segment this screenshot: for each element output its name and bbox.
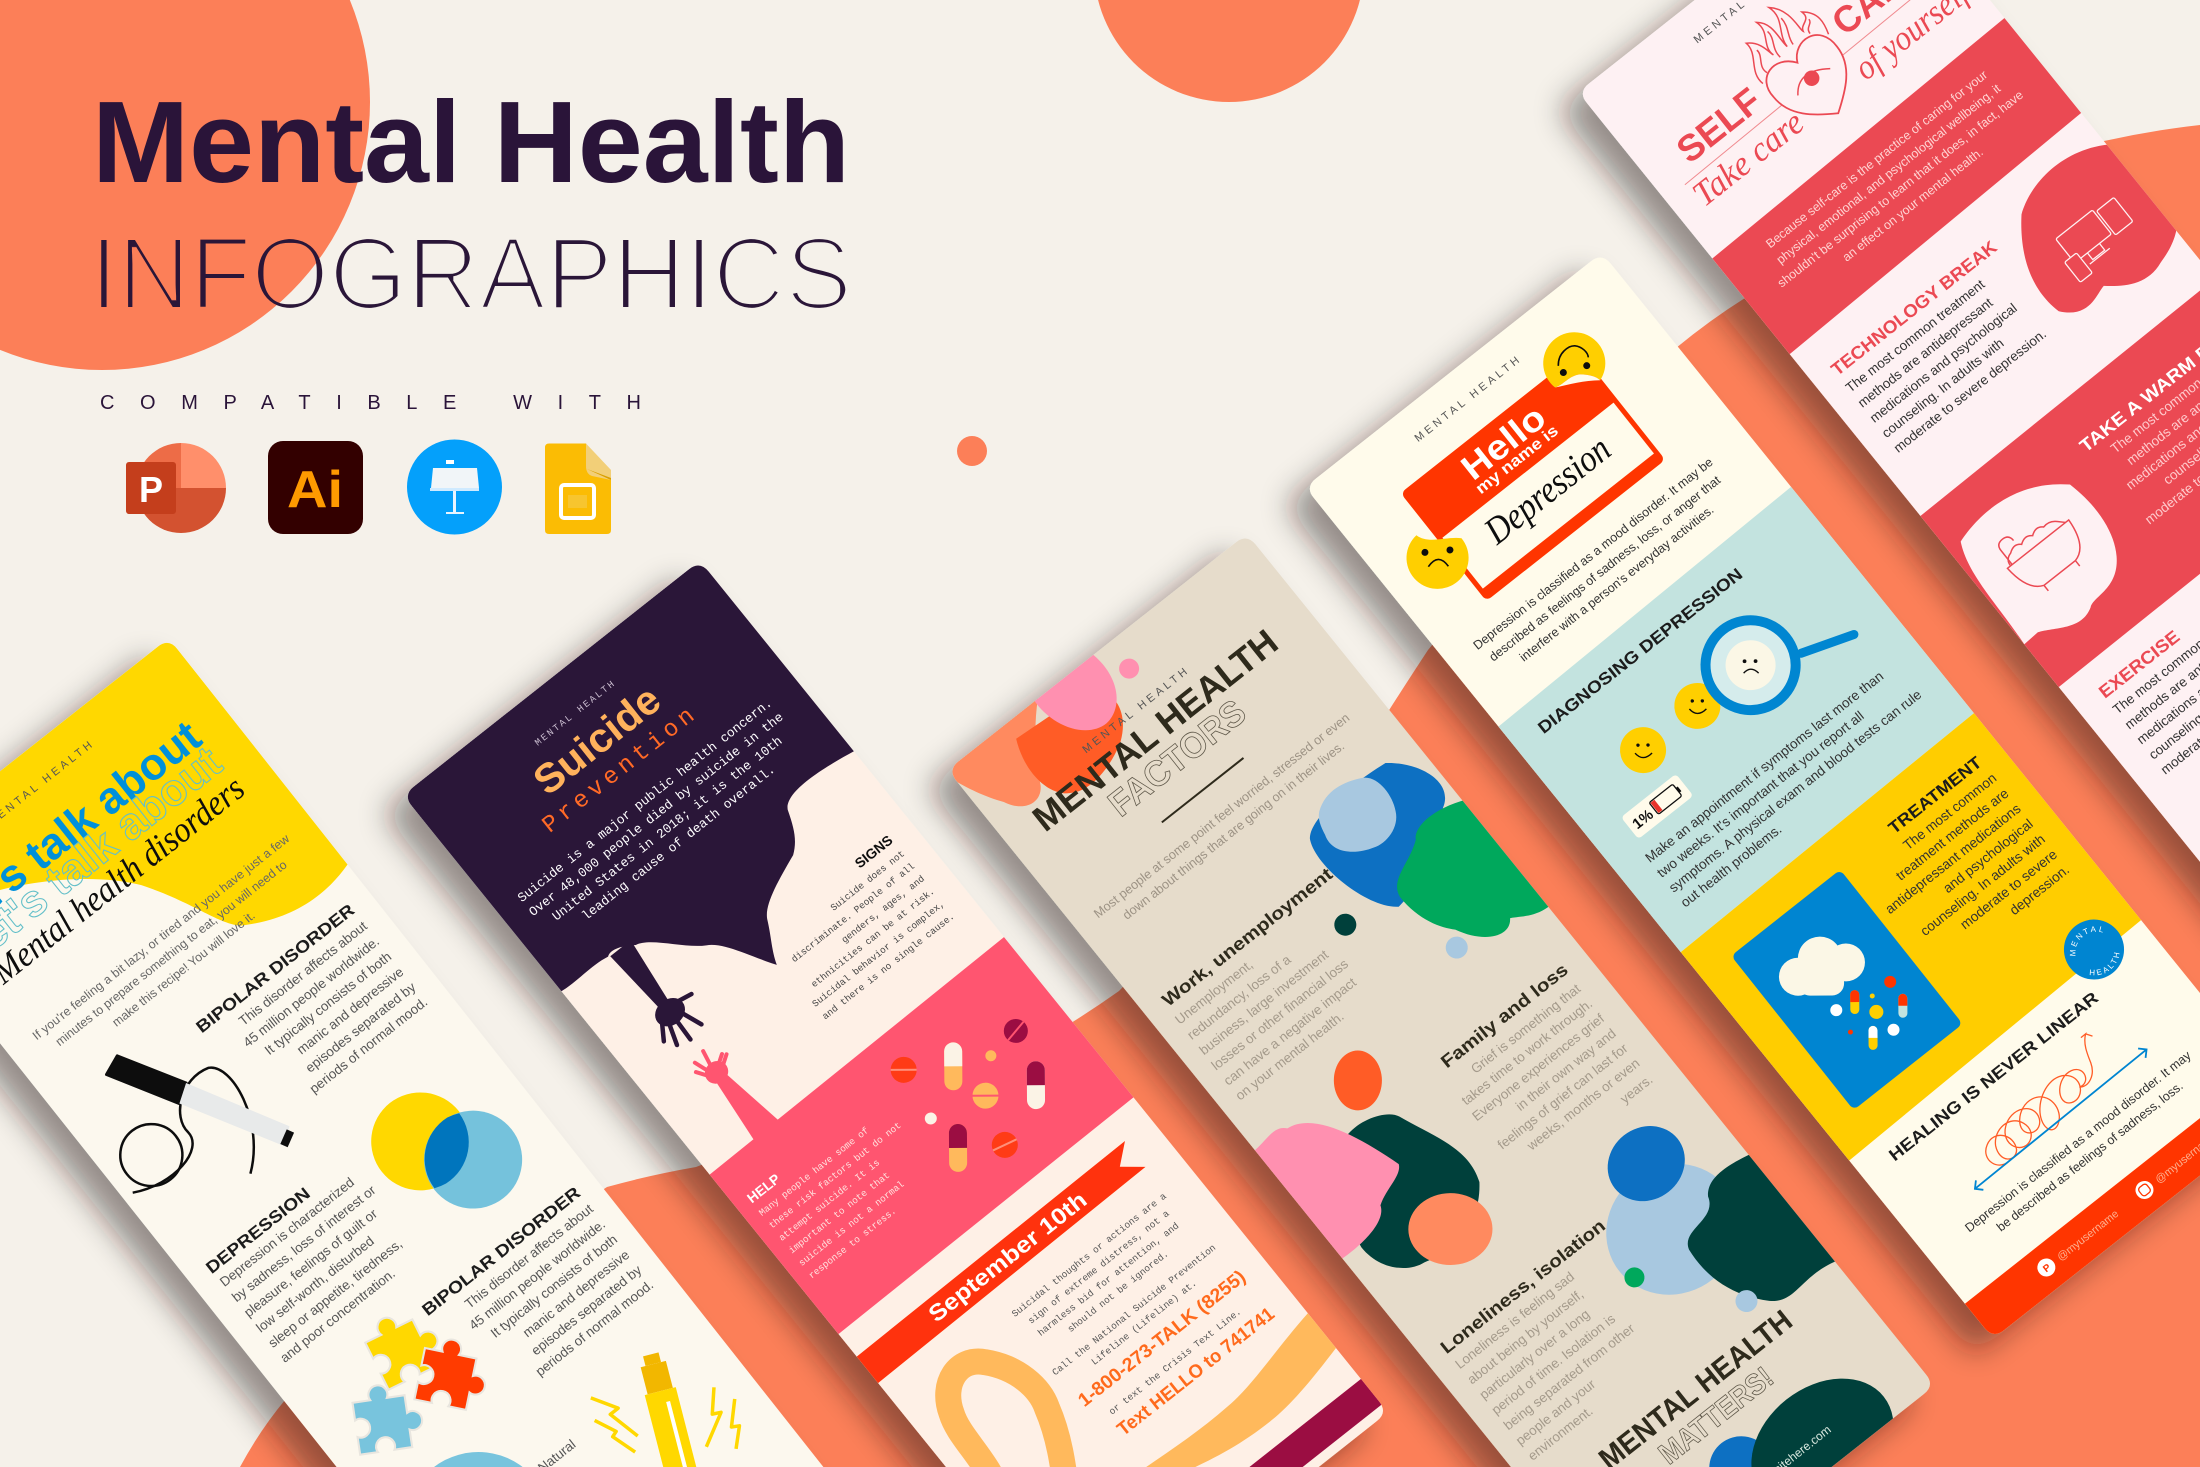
text: bipolar disorder: 45 million people worldwide. <box>240 934 382 1050</box>
panel: card 5 self care <box>1578 0 2200 953</box>
text: work: Unemployment, <box>1172 957 1256 1027</box>
text: signs: and there is no single cause. <box>820 911 957 1022</box>
heading: exercise: EXERCISE <box>2095 626 2184 702</box>
divider line <box>1161 757 1244 823</box>
script: take care: Take care <box>1685 103 1811 214</box>
text: intro: described as feelings of sadness, loss, or anger that <box>1487 473 1724 664</box>
heading: technology break: TECHNOLOGY BREAK <box>1827 237 2001 380</box>
text: treatment: counseling. In adults with <box>1918 831 2048 939</box>
circle: top centre decoration <box>1094 0 1364 102</box>
panel: warm bath band <box>1915 271 2200 691</box>
text: intro: Depression is classified as a mood disorder. It may be <box>1471 455 1716 653</box>
text: bipolar disorder 2: manic and depressive <box>520 1247 632 1340</box>
icon: PowerPoint <box>126 443 226 533</box>
text: family: feelings of grief can last for <box>1495 1040 1631 1152</box>
panel: intro band <box>1706 8 2098 356</box>
icon: peeling sad face top <box>1543 332 1605 388</box>
heading: bipolar disorder: BIPOLAR DISORDER <box>192 900 358 1037</box>
icon: devices on blob <box>1984 127 2194 335</box>
text: signs: Suicide does not <box>829 848 907 913</box>
text: technology break: medications and psychological <box>1867 300 2020 426</box>
text: loneliness: period of time. Isolation is <box>1489 1311 1618 1418</box>
title line: INFOGRAPHICS: INFOGRAPHICS <box>90 216 852 331</box>
icon: blue blob <box>434 1452 522 1467</box>
text: bipolar disorder 2: periods of normal mood. <box>533 1277 656 1379</box>
text: treatment: The most common <box>1900 770 1999 853</box>
text: family: weeks, months or even <box>1523 1055 1642 1154</box>
blobs: top right <box>1266 729 1551 1019</box>
illustration: cloud raining pills <box>1731 870 1963 1110</box>
circle: small dot <box>957 436 987 466</box>
name tag: my name is <box>1473 422 1562 498</box>
icon: Illustrator: Ai <box>287 461 343 519</box>
text: family: Grief is something that <box>1468 981 1584 1077</box>
text: work: losses or other financial loss <box>1209 956 1351 1073</box>
text: help: attempt suicide. It is <box>777 1157 882 1244</box>
text: warning signs: Lifeline (Lifeline) at. <box>1089 1278 1199 1368</box>
badge: mental health: HEALTH <box>2090 952 2120 976</box>
heading: bipolar disorder 2: BIPOLAR DISORDER <box>418 1183 584 1320</box>
text: technology break: methods are antidepressant <box>1855 295 1996 410</box>
text: intro: interfere with a person's everyday activities. <box>1517 503 1717 664</box>
badge: mental health: MENTAL <box>2070 926 2103 956</box>
text: family: Everyone experiences grief <box>1469 1011 1607 1124</box>
heading outline: factors: FACTORS <box>1100 691 1254 824</box>
panel: card 2 suicide prevention <box>403 547 1401 1467</box>
title <box>90 77 852 331</box>
heading: mental health: MENTAL HEALTH <box>1025 621 1286 839</box>
icon: peeling sad face bottom <box>1406 535 1469 589</box>
text: work: on your mental health. <box>1233 1009 1347 1103</box>
footer <box>1958 1061 2200 1348</box>
heading: work, unemployment: Work, unemployment <box>1158 864 1336 1010</box>
heading: loneliness: Loneliness, isolation <box>1437 1215 1609 1358</box>
chart: venn circles <box>371 1092 522 1208</box>
text: depression: pleasure, feelings of guilt or <box>241 1206 380 1320</box>
text: treatment: antidepressant medications <box>1882 801 2024 917</box>
text: intro: Suicide is a major public health concern. <box>515 696 775 906</box>
intro text: minutes to prepare something to eat, you will need to <box>53 858 290 1049</box>
text: loneliness: people and your <box>1513 1376 1599 1448</box>
text: help: response to stress. <box>807 1205 899 1281</box>
banner: september 10th <box>850 1141 1148 1387</box>
text: signs: Suicidal behavior is complex, <box>810 898 947 1010</box>
blobs: lower right <box>1553 1079 1839 1372</box>
text: healing: Depression is classified as a mood disorder. It may <box>1962 1048 2194 1235</box>
text: signs: discriminate. People of all <box>789 861 917 965</box>
panel: card 1 bipolar and depression <box>0 621 871 1467</box>
heading: self: SELF <box>1669 80 1769 171</box>
text: family: in their own way and <box>1513 1026 1619 1114</box>
icon: magnifier with faces <box>1597 568 1857 800</box>
icon: flaming heart with eye <box>1728 0 1873 139</box>
icon: pills <box>870 976 1092 1197</box>
text: text hello: Text HELLO to 741741 <box>1113 1303 1279 1440</box>
text: bipolar disorder: This disorder affects about <box>236 918 370 1029</box>
text: depression: sleep or appetite, tiredness, <box>265 1236 405 1351</box>
text: help: Many people have some of <box>757 1125 871 1219</box>
footer stripes <box>1082 1303 1392 1467</box>
text: intro: shouldn't be surprising to learn that it does, in fact, have <box>1775 88 2026 290</box>
compatible with label: COMPATIBLE WITH <box>100 392 641 414</box>
heading: help: HELP <box>744 1170 783 1206</box>
blobs: bottom <box>1696 1346 1920 1467</box>
text: loneliness: environment. <box>1525 1403 1596 1463</box>
heading: Prevention: Prevention <box>538 703 701 840</box>
text: bipolar disorder: episodes separated by <box>303 979 419 1075</box>
text: diagnosing: out health problems. <box>1678 822 1785 910</box>
text: help: important to note that <box>787 1170 892 1256</box>
text: technology break: moderate to severe depression. <box>1891 326 2049 456</box>
text: hotline number: 1-800-273-TALK (8255) <box>1074 1267 1250 1411</box>
name tag <box>1401 352 1665 601</box>
panel: help band <box>704 935 1136 1338</box>
text: intro: down about things that are going on in their lives. <box>1119 738 1347 922</box>
text: help: suicide is not a normal <box>797 1179 907 1269</box>
text: treatment: moderate to severe <box>1957 847 2060 932</box>
icon: puzzle pieces <box>352 1316 486 1456</box>
text: warning signs: sign of extreme distress, not a <box>1026 1208 1172 1326</box>
panel: card 4 depression <box>1274 258 2200 1367</box>
text: treatment: depression. <box>2007 862 2072 918</box>
icon: battery 1 percent <box>1621 774 1693 839</box>
text: work: redundancy, loss of a <box>1184 952 1294 1043</box>
text: depression: and poor concentration. <box>277 1266 398 1366</box>
footer: P <box>2041 1262 2054 1275</box>
text: bipolar disorder: It typically consists of both <box>262 949 394 1058</box>
text: bipolar disorder: periods of normal mood. <box>307 994 430 1096</box>
heading: healing is never linear: HEALING IS NEVER LINEAR <box>1885 988 2102 1165</box>
heading: family and loss: Family and loss <box>1437 959 1572 1072</box>
icon: pink reaching arm <box>688 1041 780 1143</box>
text: technology break: counseling. In adults with <box>1879 335 2007 441</box>
text: bipolar disorder 2: 45 million people worldwide. <box>466 1216 608 1333</box>
name tag: Hello <box>1454 398 1554 488</box>
text: loneliness: particularly over a long <box>1477 1306 1592 1402</box>
label: mental health: MENTAL HEALTH <box>1080 664 1192 756</box>
icon: dark reaching arm <box>602 931 713 1053</box>
header blob yellow <box>0 642 348 926</box>
text: loneliness: being separated from other <box>1501 1320 1638 1433</box>
text: help: these risk factors but do not <box>767 1120 903 1231</box>
text: family: takes time to work through. <box>1459 996 1595 1108</box>
text: healing: be described as feelings of sadness, loss. <box>1994 1079 2186 1234</box>
banner: september 10th: September 10th <box>923 1186 1092 1327</box>
icon: Illustrator <box>268 441 363 534</box>
intro text: If you're feeling a bit lazy, or tired and you have just a few <box>30 832 292 1043</box>
text: warning signs: harmless bid for attention, and <box>1036 1220 1181 1339</box>
label: mental health: MENTAL HEALTH <box>533 678 618 748</box>
title line: Mental Health: Mental Health <box>92 77 850 207</box>
text: treatment: and psychological <box>1940 816 2036 896</box>
text: intro: Because self-care is the practice of caring for your <box>1763 68 1990 251</box>
icon: PowerPoint: P <box>139 469 163 510</box>
icon: yellow marker and sparks <box>590 1352 742 1467</box>
text: depression: by sadness, loss of interest or <box>229 1182 379 1305</box>
divider line <box>1681 0 1935 185</box>
text: warning signs: should not be ignored. <box>1066 1248 1171 1335</box>
icon: Google Slides <box>545 444 611 534</box>
icon: Keynote <box>407 440 502 534</box>
text: intro: an effect on your mental health. <box>1840 145 1986 264</box>
text: intro: leading cause of death overall. <box>579 762 778 924</box>
text: bipolar disorder 2: It typically consists of both <box>488 1232 620 1341</box>
text: loneliness: Loneliness is feeling sad <box>1452 1269 1577 1372</box>
header blob dark <box>403 556 932 1081</box>
text: depression: Depression is characterized <box>217 1175 357 1290</box>
text: depression: low self-worth, disturbed <box>253 1233 377 1335</box>
badge: mental health <box>2064 920 2124 980</box>
heading: diagnosing depression: DIAGNOSING DEPRESSION <box>1534 564 1746 737</box>
label: mental health: MENTAL HEALTH <box>1413 353 1525 445</box>
text: intro: Over 48,000 people died by suicide in the <box>526 710 786 920</box>
blobs: middle left <box>1232 1027 1529 1340</box>
text: intro: United States in 2018; it is the 10th <box>550 734 785 924</box>
heading: treatment: TREATMENT <box>1885 752 1986 838</box>
icon: awareness ribbon <box>921 1339 1099 1467</box>
blobs: top left <box>945 635 1179 850</box>
text: warning signs: Call the National Suicide Prevention <box>1050 1242 1218 1378</box>
text: diagnosing: Make an appointment if symptoms last more than <box>1642 668 1886 866</box>
text: bipolar disorder 2: episodes separated by <box>528 1262 645 1358</box>
text: intro: Most people at some point feel worried, stressed or even <box>1091 710 1352 921</box>
icon: battery 1 percent: 1% <box>1629 806 1657 833</box>
text: bipolar disorder 2: This disorder affects about <box>462 1201 596 1311</box>
text: signs: genders, ages, and <box>840 873 927 946</box>
text: work: business, large investment <box>1196 947 1331 1058</box>
icon: marker and scribble <box>104 1054 294 1194</box>
heading: Suicide: Suicide <box>525 676 669 804</box>
panel: treatment band <box>1673 709 2150 1165</box>
chart: healing scribble <box>1942 1010 2152 1194</box>
heading: signs: SIGNS <box>851 832 896 871</box>
intro text: make this recipe! You will love it. <box>110 908 258 1030</box>
text: loneliness: about being by yourself, <box>1464 1287 1586 1387</box>
text: intro: physical, emotional, and psychological wellbeing, it <box>1774 81 2004 267</box>
icon: bath on blob <box>1945 458 2144 657</box>
name tag: Depression <box>1476 428 1619 553</box>
text: family: years. <box>1617 1072 1656 1106</box>
text: technology break: The most common treatment <box>1843 276 1988 395</box>
heading: depression: DEPRESSION <box>202 1184 314 1277</box>
text: treatment: treatment methods are <box>1893 785 2012 883</box>
panel: diagnosing band <box>1492 481 1983 955</box>
text: crisis line: or text the Crisis Text Line. <box>1107 1306 1244 1417</box>
text: signs: ethnicities can be at risk. <box>809 886 937 990</box>
text: warning signs: Suicidal thoughts or actions are a <box>1010 1191 1169 1320</box>
text: diagnosing: symptoms. A physical exam and blood tests can rule <box>1666 687 1924 895</box>
text: bipolar disorder: manic and depressive <box>294 964 406 1057</box>
text: work: can have a negative impact <box>1221 975 1359 1088</box>
circle: top left decoration <box>0 0 370 370</box>
panel: card 3 mental health factors <box>945 518 1967 1467</box>
text: diagnosing: two weeks. It's important that you report all <box>1654 708 1867 880</box>
footer: @myusername <box>2055 1208 2121 1264</box>
